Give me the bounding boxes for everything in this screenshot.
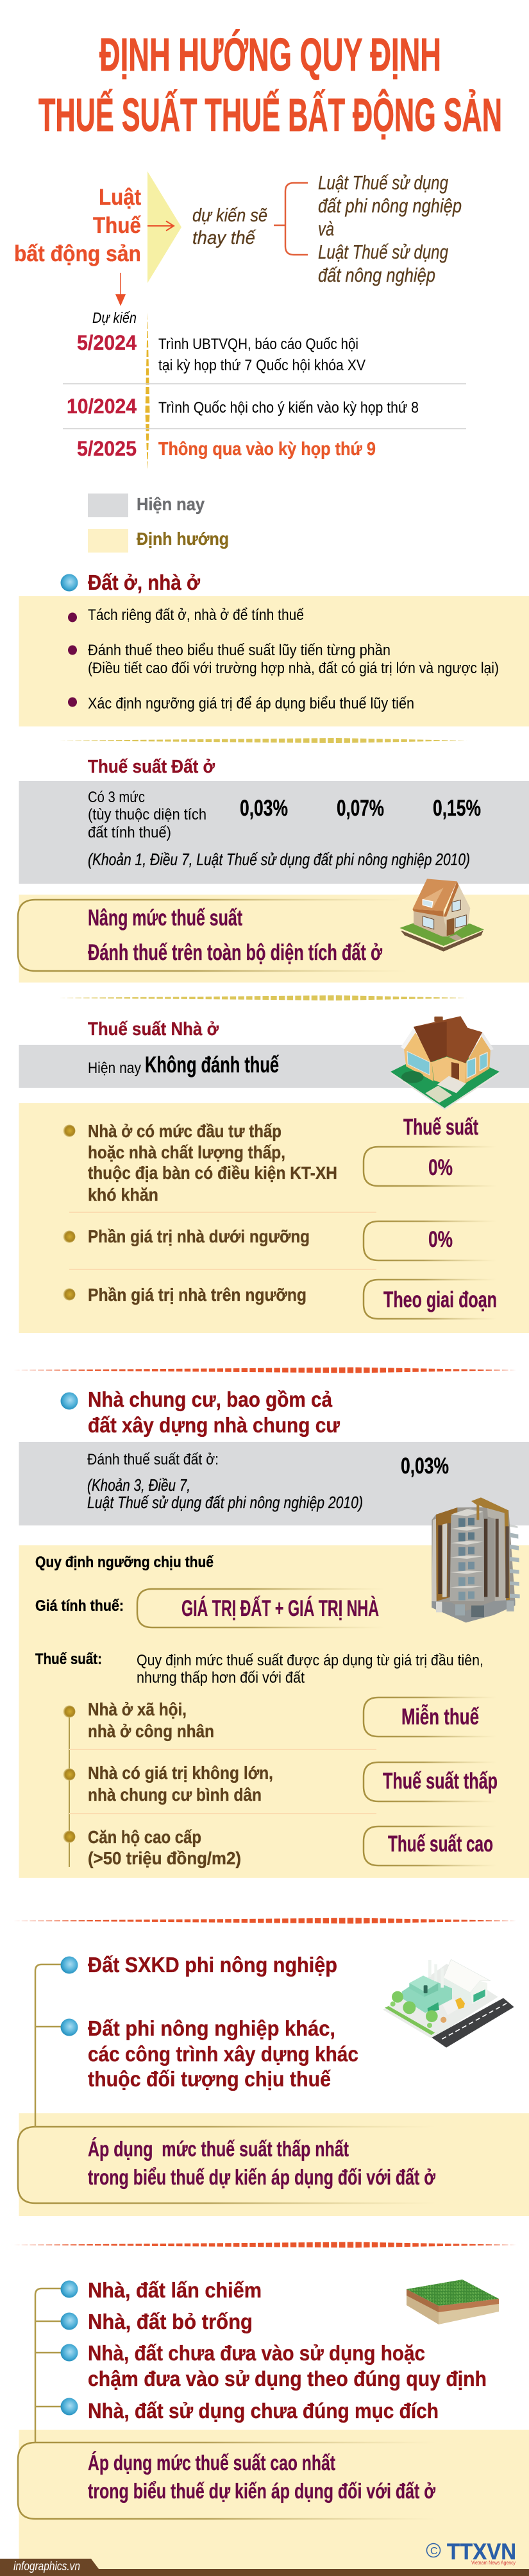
milestone 5/2025: 5/2025 <box>77 437 137 460</box>
tax rate note: Thuế suất: <box>35 1651 102 1668</box>
section heading: apartments: đất xây dựng nhà chung cư <box>88 1413 340 1437</box>
rate pill 0% <box>364 1221 497 1260</box>
section heading: residential land and housing: Đất ở, nhà ở <box>88 571 200 594</box>
milestone 5/2024: 5/2024 <box>77 331 137 354</box>
apartment row 3: Căn hộ cao cấp <box>88 1827 201 1847</box>
bullet 3: Xác định ngưỡng giá trị để áp dụng biểu thuế lũy tiến <box>88 695 414 712</box>
law name <box>14 185 141 266</box>
icon: factory <box>383 1959 514 2048</box>
callout text: Áp dụng mức thuế suất thấp nhất <box>88 2137 349 2161</box>
callout text: Áp dụng mức thuế suất cao nhất <box>88 2451 335 2475</box>
rate pill 0% <box>364 1147 497 1186</box>
legend: Định hướng <box>137 529 229 549</box>
section: misused land <box>35 2278 487 2442</box>
rate pill 0%: 0% <box>428 1155 453 1180</box>
apartment row 1: nhà ở công nhân <box>88 1721 214 1741</box>
row 3: Phần giá trị nhà trên ngưỡng <box>88 1285 306 1305</box>
rates <box>240 796 481 821</box>
text: expected to replace: thay thế <box>192 228 256 248</box>
rate pill high <box>364 1826 497 1866</box>
rates: 0,03% <box>240 796 288 821</box>
milestone 5/2024: tại kỳ họp thứ 7 Quốc hội khóa XV <box>158 357 365 374</box>
label: expected: Dự kiến <box>92 309 137 326</box>
panel: no housing tax: Không đánh thuế <box>145 1052 279 1078</box>
law name: bất động sản <box>14 241 141 266</box>
panel: no housing tax: Hiện nay <box>88 1060 141 1077</box>
text: expected to replace: dự kiến sẽ <box>192 205 267 226</box>
panel: apartment tax threshold <box>19 1545 529 1878</box>
taxable value <box>35 1589 385 1627</box>
apartment row 2: Nhà có giá trị không lớn, <box>88 1763 273 1783</box>
item: other non-agricultural land: Đất phi nông nghiệp khác, <box>88 2016 335 2040</box>
logo: TTXVN: TTXVN <box>447 2539 516 2564</box>
apartment row 2: nhà chung cư bình dân <box>88 1785 262 1805</box>
section heading: apartments: Nhà chung cư, bao gồm cả <box>88 1387 333 1411</box>
text: replaced laws: đất phi nông nghiệp <box>318 194 462 217</box>
text: three levels: đất tính thuế) <box>88 824 171 841</box>
heading: land tax rate: Thuế suất Đất ở <box>88 757 215 777</box>
callout text: Nâng mức thuế suất <box>88 906 242 931</box>
rate pill staged <box>364 1280 497 1319</box>
text: expected to replace <box>192 205 267 248</box>
taxable value: GIÁ TRỊ ĐẤT + GIÁ TRỊ NHÀ <box>181 1595 379 1621</box>
section heading: apartments <box>60 1387 340 1437</box>
apartment row 1 <box>63 1699 214 1741</box>
row 2: Phần giá trị nhà dưới ngưỡng <box>88 1226 310 1246</box>
section: non-agricultural land <box>35 1953 358 2126</box>
legend <box>88 494 229 553</box>
panel: orientation list <box>19 596 529 726</box>
taxable value: Giá tính thuế: <box>35 1597 124 1615</box>
item: other non-agricultural land: thuộc đối tượng chịu thuế <box>88 2067 332 2091</box>
panel: housing tax orientation <box>19 1103 529 1333</box>
law name: Luật <box>99 185 141 210</box>
milestone 5/2025: Thông qua vào kỳ họp thứ 9 <box>158 439 376 459</box>
rates: 0,15% <box>433 796 481 821</box>
heading: housing tax rate: Thuế suất Nhà ở <box>88 1019 219 1040</box>
logo: TTXVN: C <box>430 2546 438 2557</box>
connector <box>35 1964 62 2126</box>
text: replaced laws: Luật Thuế sử dụng <box>318 171 448 194</box>
callout text <box>88 2451 435 2503</box>
bullet 2: Đánh thuế theo biểu thuế suất lũy tiến từng phần <box>88 642 390 659</box>
callout text <box>88 2137 435 2189</box>
tax rate note: Quy định mức thuế suất được áp dụng từ giá trị đầu tiên, <box>137 1652 483 1669</box>
text: three levels: Có 3 mức <box>88 789 145 806</box>
panel: current apartment tax: Luật Thuế sử dụng đất phi nông nghiệp 2010) <box>87 1493 363 1512</box>
panel: current apartment tax <box>19 1442 529 1525</box>
item: not yet used: chậm đưa vào sử dụng theo đúng quy định <box>88 2367 487 2391</box>
item: encroached: Nhà, đất lấn chiếm <box>88 2278 262 2302</box>
item: wrong purpose: Nhà, đất sử dụng chưa đúng mục đích <box>88 2399 439 2423</box>
yellow triangle arrow <box>147 171 181 283</box>
tax rate note: nhưng thấp hơn đối với đất <box>137 1669 305 1687</box>
heading: rate column: Thuế suất <box>403 1115 478 1140</box>
rate pill exempt <box>364 1697 497 1737</box>
text: replaced laws: và <box>318 218 334 240</box>
item: not yet used: Nhà, đất chưa đưa vào sử dụng hoặc <box>88 2341 425 2365</box>
text: replaced laws <box>318 171 462 286</box>
milestone 10/2024 <box>67 395 419 418</box>
callout text <box>88 906 382 965</box>
icon: soil block with grass <box>407 2280 499 2324</box>
bracket <box>274 183 308 255</box>
milestone 10/2024: Trình Quốc hội cho ý kiến vào kỳ họp thứ 8 <box>158 399 419 416</box>
apartment row 3 <box>63 1827 241 1868</box>
item: vacant: Nhà, đất bỏ trống <box>88 2310 253 2333</box>
apartment row 3: (>50 triệu đồng/m2) <box>88 1848 241 1868</box>
title <box>38 29 502 141</box>
item: not yet used <box>60 2341 487 2391</box>
arrow: down to timeline <box>116 273 125 305</box>
law name: Thuế <box>93 213 141 238</box>
bullet 1: Tách riêng đất ở, nhà ở để tính thuế <box>88 606 305 624</box>
arrow: right <box>147 221 174 231</box>
item: other non-agricultural land <box>60 2016 358 2091</box>
panel: lowest rate <box>18 2113 529 2216</box>
item: business land: Đất SXKD phi nông nghiệp <box>88 1953 337 1977</box>
rate pill low <box>364 1762 498 1801</box>
panel: current apartment tax: 0,03% <box>401 1454 449 1479</box>
text: three levels: (tùy thuộc diện tích <box>88 806 206 823</box>
apartment row 1: Nhà ở xã hội, <box>88 1699 187 1719</box>
callout text: Đánh thuế trên toàn bộ diện tích đất ở <box>88 940 382 965</box>
legend: Hiện nay <box>137 494 205 514</box>
milestone 5/2024 <box>77 331 365 374</box>
text: replaced laws: đất nông nghiệp <box>318 264 435 286</box>
icon: apartment building <box>432 1497 520 1622</box>
panel: no housing tax <box>19 1045 529 1088</box>
text: three levels <box>88 789 206 841</box>
bullet 2 <box>68 642 499 677</box>
footer band <box>0 2559 529 2576</box>
diagram: law replacement <box>14 171 462 286</box>
panel: raise land tax <box>18 895 529 983</box>
row 1 <box>63 1121 337 1205</box>
icon: house on grass <box>399 879 484 952</box>
row 1: hoặc nhà chất lượng thấp, <box>88 1142 285 1162</box>
item: other non-agricultural land: các công trình xây dựng khác <box>88 2042 358 2066</box>
tax rate note <box>35 1651 483 1687</box>
apartment row 2 <box>63 1763 273 1805</box>
panel: current land tax <box>19 781 529 884</box>
row 1: khó khăn <box>88 1185 158 1205</box>
rates: 0,07% <box>337 796 384 821</box>
logo: TTXVN: Vietnam News Agency <box>471 2560 516 2566</box>
panel: current apartment tax: (Khoản 3, Điều 7, <box>87 1475 190 1495</box>
timeline axis <box>145 313 150 468</box>
milestone 10/2024: 10/2024 <box>67 395 137 418</box>
connector <box>35 2288 62 2442</box>
rate pill exempt: Miễn thuế <box>401 1704 479 1730</box>
source site: infographics.vn <box>13 2560 80 2573</box>
milestone 5/2025 <box>77 437 376 460</box>
text: replaced laws: Luật Thuế sử dụng <box>318 241 448 263</box>
rate pill 0%: 0% <box>428 1227 453 1252</box>
subheading: Quy định ngưỡng chịu thuế <box>35 1554 214 1571</box>
icon: suburban house <box>390 1016 500 1110</box>
row 1: Nhà ở có mức đầu tư thấp <box>88 1121 281 1141</box>
row 1: thuộc địa bàn có điều kiện KT-XH <box>88 1163 337 1183</box>
timeline <box>63 309 466 470</box>
panel: highest rate <box>18 2430 529 2569</box>
panel: current apartment tax: Đánh thuế suất đất ở: <box>87 1451 219 1468</box>
connector end <box>35 2113 36 2127</box>
milestone 5/2024: Trình UBTVQH, báo cáo Quốc hội <box>158 336 358 353</box>
connector end <box>35 2430 36 2443</box>
